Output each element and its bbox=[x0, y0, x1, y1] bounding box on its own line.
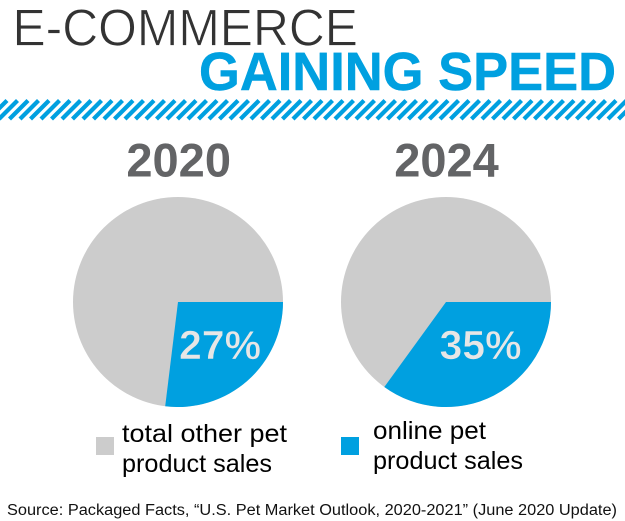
legend label: online: online pet bbox=[373, 417, 486, 445]
heading: 2020: 2020 bbox=[126, 134, 231, 186]
legend label: total other: product sales bbox=[122, 450, 272, 478]
pie chart: 2020 bbox=[73, 197, 283, 407]
title: GAINING SPEED: GAINING SPEED bbox=[199, 42, 616, 102]
pie chart: 2024 bbox=[341, 197, 551, 407]
value: 27%: 27% bbox=[179, 322, 261, 368]
swatch: gray bbox=[96, 437, 114, 455]
striped divider band bbox=[0, 99, 625, 121]
panel: 2020 chart bbox=[73, 134, 283, 407]
legend: online pet product sales bbox=[341, 417, 523, 475]
panel: 2024 chart bbox=[341, 134, 551, 407]
value: 35%: 35% bbox=[439, 322, 522, 368]
heading: 2024: 2024 bbox=[394, 134, 499, 186]
title: E-COMMERCE: E-COMMERCE bbox=[12, 0, 358, 57]
legend label: total other: total other pet bbox=[122, 420, 287, 448]
legend label: online: product sales bbox=[373, 447, 523, 475]
legend: total other pet product sales bbox=[96, 420, 287, 478]
source note: Source: Packaged Facts, “U.S. Pet Market Outlook, 2020-2021” (June 2020 Update) bbox=[7, 502, 617, 519]
swatch: blue bbox=[341, 437, 359, 455]
